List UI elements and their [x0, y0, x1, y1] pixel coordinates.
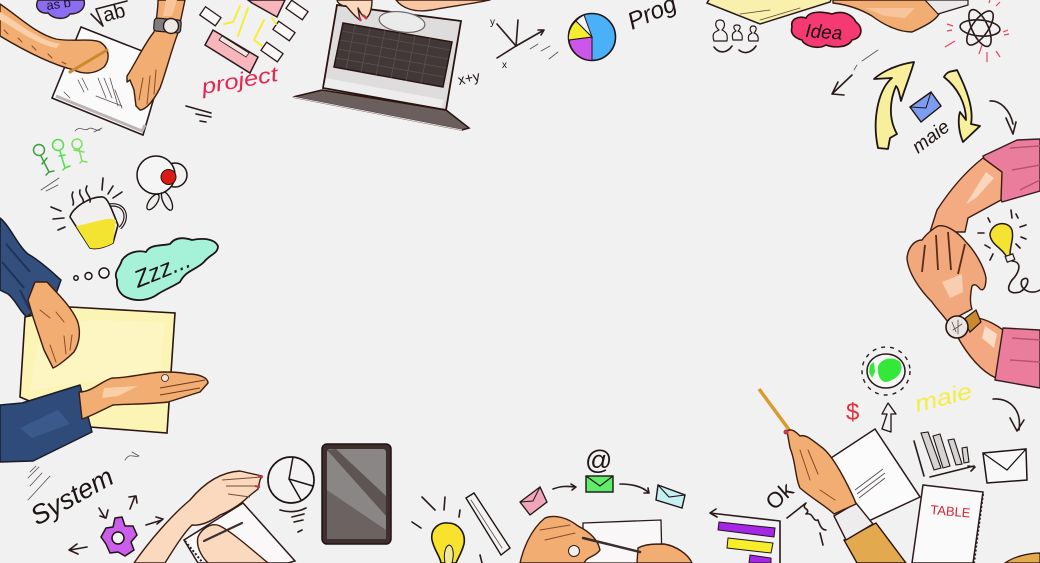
hand: top centre — [396, 0, 490, 11]
cloud: Zzz — [116, 238, 218, 300]
hand: pointing at idea, top right — [833, 0, 968, 32]
cloud: Idea: Idea — [805, 21, 843, 45]
cloud: Idea — [791, 12, 861, 47]
text: project: project — [199, 63, 281, 99]
icon: tablet — [322, 444, 391, 544]
arm: lower right with wristwatch and pink sleeve — [946, 310, 1040, 388]
arm: left hand writing — [0, 4, 108, 73]
laptop — [293, 5, 469, 130]
icons: three green stick figures — [34, 139, 87, 191]
arm: upper right with pink sleeve — [930, 139, 1040, 232]
icon: purple gear with arrows — [69, 496, 163, 556]
icon: bird-like doodle with red dot — [137, 156, 187, 212]
text: square root of ab: ab — [101, 0, 128, 27]
paper: large yellow sheet on left — [20, 307, 175, 433]
icon: light bulb with cord, right — [978, 210, 1040, 293]
arrow: small outline arrow pointing left — [832, 50, 878, 95]
arm: right hand with watch — [127, 0, 185, 110]
arm: left upper blue sleeve — [0, 218, 61, 317]
icon: pink envelope — [520, 487, 547, 515]
text: System: System — [25, 461, 119, 531]
arm: hand holding pencil with tan sleeve — [784, 430, 906, 563]
squiggle under paper — [75, 128, 102, 132]
trackpad-like panel — [378, 9, 426, 35]
sketch: coordinate axes: x — [502, 60, 507, 71]
thought bubble dots — [74, 268, 109, 280]
arrow: yellow curved down — [944, 70, 980, 142]
icon group: three people with arrows — [713, 20, 758, 53]
arrow: pink to green — [553, 484, 576, 490]
icon: wristwatch — [153, 18, 181, 34]
paper: top left document — [52, 27, 165, 135]
notebook: TABLE — [912, 485, 983, 563]
icon: coffee cup — [51, 178, 125, 249]
icon: atom with red sparks — [945, 0, 1009, 62]
pie chart: blue purple yellow — [568, 14, 616, 60]
notebook: TABLE: TABLE — [930, 502, 971, 521]
hand: fingers with red nails on laptop — [337, 0, 372, 21]
icon: green envelope — [586, 476, 613, 492]
corner: arm bottom right — [1005, 553, 1040, 563]
icon: green globe — [862, 347, 910, 395]
icon: ruler — [466, 493, 510, 555]
text: yellow maie: maie — [912, 378, 974, 417]
icon: light bulb bottom — [412, 497, 482, 563]
cloud: Zzz: Zzz... — [129, 247, 195, 294]
arrow: small curved right — [990, 101, 1016, 134]
boxes: small flow blocks — [200, 0, 308, 62]
arrow: green to blue — [620, 484, 649, 493]
text: Ok: Ok — [761, 477, 799, 515]
pencil: pointing — [759, 389, 790, 431]
paper: top yellow sheet — [707, 0, 832, 24]
arrow: yellow curved up — [874, 62, 914, 149]
bar chart: outlined bars — [914, 432, 975, 477]
icon: gold wristwatch — [946, 310, 981, 338]
sketch: coordinate axes: y — [490, 17, 495, 28]
paper: bottom centre — [583, 520, 662, 563]
pencil: left hand — [70, 50, 107, 72]
hands: holding pen, bottom centre — [520, 516, 692, 563]
icon: blue envelope bottom — [656, 485, 685, 508]
diagram: project block scheme — [199, 0, 308, 99]
pie chart: outline — [268, 457, 314, 532]
hand: upper left fist on paper — [28, 282, 79, 368]
squiggle next to Ok — [787, 503, 826, 545]
keyboard — [334, 23, 452, 87]
sketch marks below project — [186, 106, 211, 122]
notebook: bottom left — [184, 503, 295, 563]
hand: lower left open palm — [79, 372, 208, 419]
icon: white envelope — [983, 449, 1027, 483]
paper: white sheet bottom right — [831, 429, 920, 525]
arm: left lower blue sleeve — [0, 385, 92, 462]
text: at sign: @ — [585, 445, 612, 475]
sketch: coordinate axes — [456, 17, 558, 88]
text: maie black: maie — [908, 116, 954, 158]
hand: writing on notebook — [197, 523, 268, 563]
icon: blue envelope — [910, 92, 941, 122]
text: x+y: x+y — [456, 68, 481, 88]
bar chart: purple and yellow bars — [710, 509, 780, 563]
hands: clasped, right side — [907, 226, 986, 322]
arrow: up outline — [882, 403, 896, 432]
text: dollar sign: $ — [846, 399, 859, 426]
hatch marks left of System — [28, 452, 139, 500]
arm: bottom hand resting — [134, 471, 263, 563]
icon: purple cloud — [37, 0, 84, 18]
arrow: black curved — [993, 399, 1024, 431]
